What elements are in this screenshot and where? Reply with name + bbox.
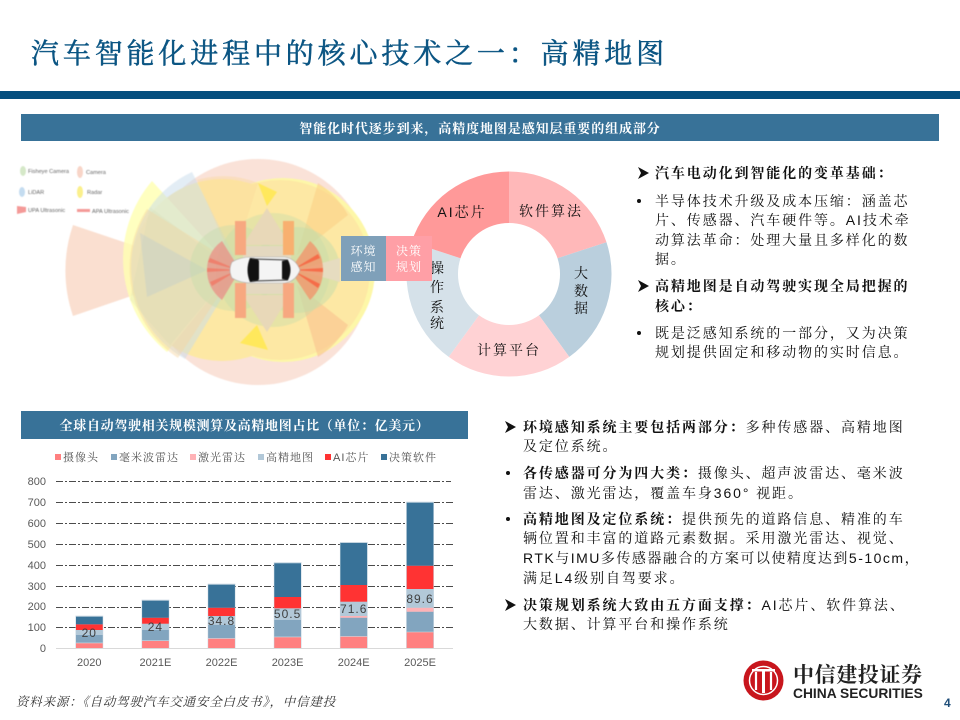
HD map data labels: 34.8 bbox=[208, 614, 235, 628]
environment sensing box: 感知 bbox=[350, 258, 376, 275]
x axis labels bbox=[77, 657, 436, 669]
y axis labels: 300 bbox=[28, 581, 46, 593]
HD map data labels bbox=[82, 592, 434, 640]
legend: 摄像头 bbox=[63, 450, 99, 464]
bullet: semiconductors and AI: 据。 bbox=[655, 251, 687, 267]
text block: bottom right bbox=[505, 419, 920, 632]
labels: environment sensing and decision planning bbox=[341, 236, 432, 281]
donut chart: 大 bbox=[574, 265, 590, 281]
item: decision planning bbox=[505, 597, 906, 632]
page number: 4 bbox=[944, 696, 951, 710]
item: sensor types: 雷达、激光雷达，覆盖车身360° 视距。 bbox=[523, 485, 804, 501]
y axis labels: 700 bbox=[28, 497, 46, 509]
logo: China Securities bbox=[744, 659, 923, 701]
item: HD map and positioning: 满足L4级别自驾要求。 bbox=[523, 570, 685, 586]
item: decision planning: 大数据、计算平台和操作系统 bbox=[523, 616, 730, 632]
y axis labels: 100 bbox=[28, 622, 46, 634]
legend: Radar bbox=[87, 190, 102, 196]
x axis labels: 2024E bbox=[338, 657, 370, 669]
bullet: HD map role: 既是泛感知系统的一部分，又为决策 bbox=[655, 325, 909, 341]
donut chart: 数 bbox=[574, 283, 590, 299]
bullet: semiconductors and AI: 片、传感器、汽车硬件等。AI技术牵 bbox=[655, 212, 911, 228]
x axis labels: 2021E bbox=[139, 657, 171, 669]
item: environment sensing: 及定位系统。 bbox=[523, 438, 618, 454]
HD map data labels: 71.6 bbox=[340, 602, 367, 616]
bars bbox=[76, 502, 434, 648]
HD map data labels: 20 bbox=[82, 626, 97, 640]
legend: 决策软件 bbox=[389, 450, 437, 464]
decision planning box bbox=[386, 236, 432, 281]
legend: LiDAR bbox=[28, 190, 44, 196]
item: HD map and positioning: 高精地图及定位系统：提供预先的道路信息、精准的车 bbox=[523, 511, 905, 527]
sensor ranges bbox=[65, 159, 375, 385]
legend bbox=[17, 166, 129, 215]
item: environment sensing: 环境感知系统主要包括两部分：多种传感器、高精地图 bbox=[523, 419, 905, 435]
HD map data labels: 24 bbox=[148, 620, 163, 634]
donut chart: 系 bbox=[430, 299, 446, 315]
text block: top right bbox=[637, 165, 911, 360]
source note: 资料来源：《自动驾驶汽车交通安全白皮书》，中信建投 bbox=[16, 692, 336, 710]
logo emblem bbox=[744, 660, 784, 700]
donut chart bbox=[406, 172, 612, 376]
item: sensor types: 各传感器可分为四大类：摄像头、超声波雷达、毫米波 bbox=[523, 465, 905, 481]
logo English name: CHINA SECURITIES bbox=[793, 686, 923, 701]
title: 汽车智能化进程中的核心技术之一：高精地图 bbox=[31, 32, 668, 72]
decision planning box: 决策 bbox=[396, 242, 422, 259]
bullet: HD map role: 规划提供固定和移动物的实时信息。 bbox=[655, 344, 909, 360]
bullet: HD map role bbox=[637, 325, 909, 360]
x axis labels: 2022E bbox=[206, 657, 237, 669]
legend: Camera bbox=[86, 170, 107, 176]
stacked bar chart bbox=[28, 450, 453, 669]
donut chart: 操 bbox=[430, 260, 446, 276]
top banner: 智能化时代逐步到来，高精度地图是感知层重要的组成部分 bbox=[299, 118, 661, 137]
x axis labels: 2020 bbox=[77, 657, 102, 669]
item: HD map and positioning: 辆位置和丰富的道路元素数据。采用激光雷达、视觉、 bbox=[523, 530, 905, 546]
donut chart: 统 bbox=[430, 315, 446, 331]
legend: UPA Ultrasonic bbox=[28, 208, 65, 214]
legend: APA Ultrasonic bbox=[92, 209, 129, 215]
y axis labels: 400 bbox=[28, 560, 46, 572]
sensor coverage diagram bbox=[16, 158, 375, 386]
environment sensing box: 环境 bbox=[350, 242, 376, 259]
bullet: semiconductors and AI bbox=[637, 193, 911, 267]
x axis labels: 2023E bbox=[272, 657, 304, 669]
HD map data labels: 50.5 bbox=[274, 607, 301, 621]
donut chart: 软件算法 bbox=[519, 203, 583, 219]
y axis labels: 500 bbox=[28, 539, 46, 551]
car bbox=[230, 257, 300, 283]
bullet: semiconductors and AI: 半导体技术升级及成本压缩：涵盖芯 bbox=[655, 193, 909, 209]
legend: Fisheye Camera bbox=[28, 169, 70, 175]
y axis labels: 200 bbox=[28, 601, 46, 613]
decision planning box: 规划 bbox=[396, 258, 422, 275]
donut chart: 计算平台 bbox=[477, 342, 541, 358]
y axis labels: 800 bbox=[28, 476, 46, 488]
heading: foundation of change: 汽车电动化到智能化的变革基础： bbox=[655, 165, 894, 181]
chart banner: 全球自动驾驶相关规模测算及高精地图占比（单位：亿美元） bbox=[60, 415, 429, 434]
header rule bbox=[0, 91, 960, 99]
logo Chinese name: 中信建投证券 bbox=[793, 659, 923, 689]
legend: AI芯片 bbox=[333, 450, 369, 464]
donut chart: AI芯片 bbox=[437, 204, 487, 220]
legend: 高精地图 bbox=[266, 450, 314, 464]
HD map data labels: 89.6 bbox=[406, 592, 434, 606]
environment sensing box bbox=[341, 236, 386, 281]
y axis labels bbox=[28, 476, 46, 655]
heading: HD map core: 核心： bbox=[655, 298, 703, 314]
legend: 激光雷达 bbox=[198, 450, 246, 464]
y axis labels: 600 bbox=[28, 518, 46, 530]
item: HD map and positioning: RTK与IMU多传感器融合的方案可以使精度达到5-10cm， bbox=[523, 550, 920, 566]
x axis labels: 2025E bbox=[404, 657, 436, 669]
heading: HD map core: 高精地图是自动驾驶实现全局把握的 bbox=[655, 278, 909, 294]
y axis labels: 0 bbox=[40, 643, 46, 655]
legend bbox=[55, 450, 437, 464]
heading: HD map core bbox=[638, 278, 909, 314]
bullet: semiconductors and AI: 动算法革命：处理大量且多样化的数 bbox=[655, 232, 909, 248]
ultrasonic zones bbox=[207, 221, 323, 318]
donut chart: 作 bbox=[430, 279, 446, 295]
chart banner bbox=[21, 411, 468, 439]
top banner bbox=[21, 114, 939, 141]
legend: 毫米波雷达 bbox=[119, 450, 179, 464]
item: sensor types bbox=[506, 465, 905, 501]
item: environment sensing bbox=[505, 419, 905, 454]
item: decision planning: 决策规划系统大致由五方面支撑：AI芯片、软件算法、 bbox=[523, 597, 906, 613]
item: HD map and positioning bbox=[506, 511, 920, 586]
donut chart: 据 bbox=[574, 300, 590, 316]
